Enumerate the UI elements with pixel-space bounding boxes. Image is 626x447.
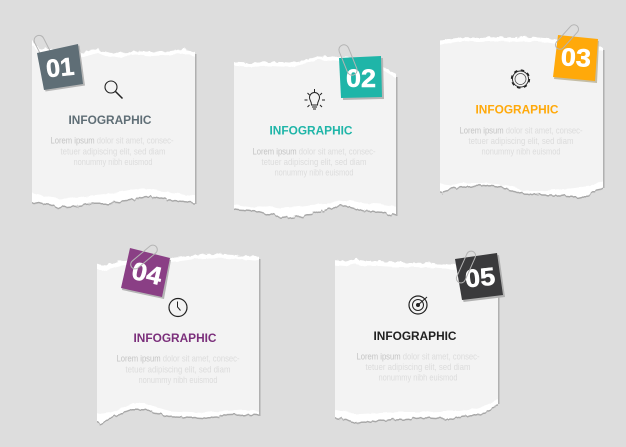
panel: card 4 xyxy=(95,243,261,424)
torn paper 2 xyxy=(232,56,398,218)
paper clip 3 xyxy=(554,23,580,51)
sticky note 03: 03 xyxy=(560,43,592,73)
body text 3: Lorem ipsum dolor sit amet, consec- xyxy=(460,126,582,136)
sticky note 02: 02 xyxy=(346,65,376,93)
sticky note 01 xyxy=(37,44,85,92)
body text 3: tetuer adipiscing elit, sed diam xyxy=(468,136,574,147)
panel: card 1 xyxy=(30,34,197,209)
icon: target xyxy=(409,296,427,314)
sticky note 02 xyxy=(339,56,384,100)
heading 2: INFOGRAPHIC xyxy=(270,126,352,138)
body text 2: tetuer adipiscing elit, sed diam xyxy=(262,157,367,168)
heading 1: INFOGRAPHIC xyxy=(68,115,152,127)
panel: card 5 xyxy=(333,250,505,424)
body text 4: tetuer adipiscing elit, sed diam xyxy=(126,364,231,376)
sticky note 04: 04 xyxy=(129,257,165,291)
icon: light bulb xyxy=(304,89,325,109)
body text 4: nonummy nibh euismod xyxy=(138,375,218,386)
sticky note 05: 05 xyxy=(464,262,497,293)
body text 5: nonummy nibh euismod xyxy=(378,372,458,384)
sticky note 03 xyxy=(553,35,599,83)
sticky note 04 xyxy=(121,248,171,299)
body text 2: Lorem ipsum dolor sit amet, consec- xyxy=(252,146,376,158)
body text 1 xyxy=(50,136,174,168)
paper clip 4 xyxy=(129,243,159,271)
panel: card 2 xyxy=(232,43,398,219)
torn paper 4 xyxy=(95,254,261,424)
heading 4: INFOGRAPHIC xyxy=(134,333,216,345)
body text 1: nonummy nibh euismod xyxy=(74,157,152,168)
body text 4: Lorem ipsum dolor sit amet, consec- xyxy=(116,354,240,364)
torn paper 3 xyxy=(438,37,605,198)
body text 2: nonummy nibh euismod xyxy=(274,168,354,178)
icon: gear xyxy=(512,70,530,88)
torn paper 1 xyxy=(30,38,197,208)
body text 1: tetuer adipiscing elit, sed diam xyxy=(60,146,166,158)
panel: card 3 xyxy=(438,23,605,199)
sticky note 05 xyxy=(455,253,505,302)
body text 2 xyxy=(252,146,376,178)
body text 1: Lorem ipsum dolor sit amet, consec- xyxy=(50,136,174,146)
torn paper 5 xyxy=(333,259,500,424)
body text 5: tetuer adipiscing elit, sed diam xyxy=(366,362,471,373)
icon: clock xyxy=(169,298,187,316)
paper clip 1 back xyxy=(32,34,58,70)
heading 3: INFOGRAPHIC xyxy=(476,104,558,116)
body text 4 xyxy=(116,354,240,386)
icon: magnifier xyxy=(105,81,122,98)
paper clip 5 xyxy=(455,250,477,284)
body text 3 xyxy=(460,126,582,158)
paper clip 2 xyxy=(337,43,359,77)
body text 5: Lorem ipsum dolor sit amet, consec- xyxy=(356,352,480,362)
body text 3: nonummy nibh euismod xyxy=(482,146,560,158)
heading 5: INFOGRAPHIC xyxy=(374,331,456,343)
body text 5 xyxy=(356,352,480,384)
sticky note 01: 01 xyxy=(45,53,76,83)
